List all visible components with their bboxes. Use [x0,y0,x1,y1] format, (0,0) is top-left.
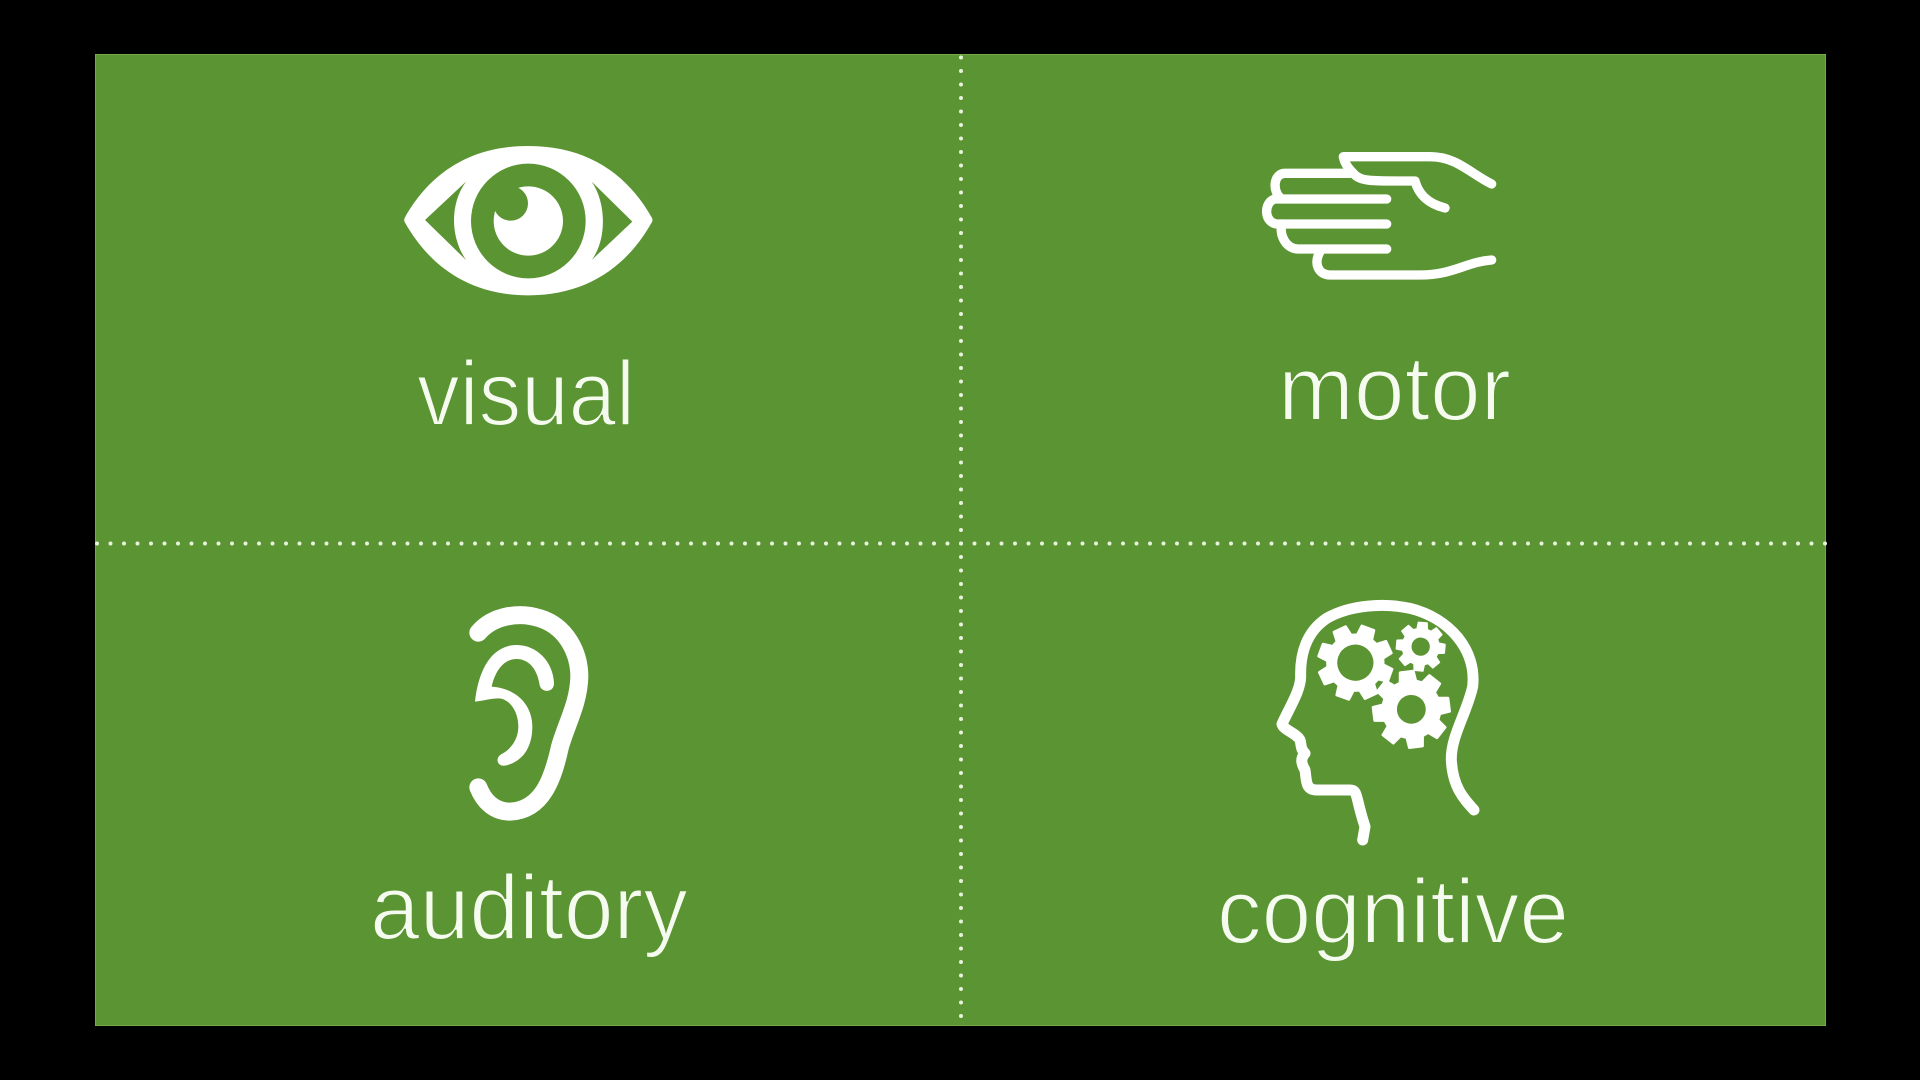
heading: motor: motor [1278,338,1511,440]
heading: cognitive: cognitive [1217,861,1569,963]
icon: hand [1267,157,1492,275]
icon: ear [475,615,579,812]
heading: visual: visual [417,343,635,445]
icon: head with gears [1282,605,1474,840]
heading: auditory: auditory [370,857,688,959]
icon: eye [404,146,652,295]
